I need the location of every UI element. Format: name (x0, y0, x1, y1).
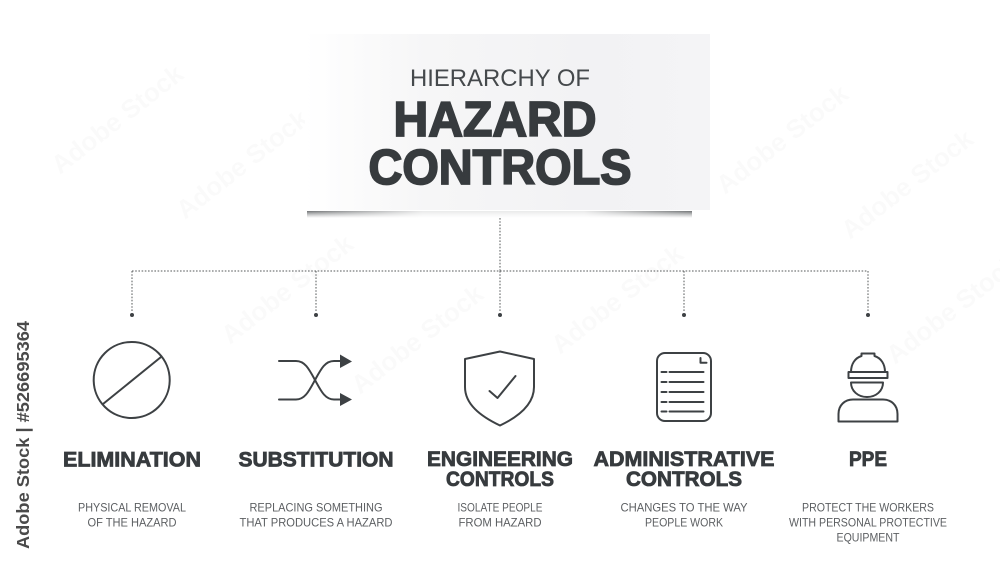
description: administrative controls: PEOPLE WORK (645, 516, 724, 530)
column: substitution (238, 354, 394, 530)
icon: shuffle arrows (279, 354, 352, 406)
description: substitution: REPLACING SOMETHING (250, 500, 382, 514)
description: ppe: WITH PERSONAL PROTECTIVE (789, 516, 947, 530)
icon: document (657, 353, 711, 421)
connector tree (132, 218, 868, 312)
icon: worker with hard hat (838, 354, 898, 422)
icon: prohibition circle (94, 342, 170, 418)
heading: substitution: SUBSTITUTION (238, 448, 394, 472)
description: engineering controls: ISOLATE PEOPLE (458, 500, 542, 514)
column: administrative controls (594, 353, 774, 530)
column: engineering controls (427, 352, 573, 530)
title text: CONTROLS (368, 141, 632, 195)
description: elimination: OF THE HAZARD (88, 516, 177, 530)
description: elimination: PHYSICAL REMOVAL (78, 500, 186, 514)
description: substitution: THAT PRODUCES A HAZARD (240, 516, 393, 530)
connector end dots (130, 313, 870, 317)
heading: ppe: PPE (849, 448, 887, 471)
heading: engineering controls: ENGINEERING (427, 448, 573, 471)
description: elimination (78, 500, 186, 530)
heading: administrative controls: CONTROLS (626, 468, 742, 491)
description: substitution (240, 500, 393, 530)
icon: shield with check (465, 352, 534, 426)
description: administrative controls: CHANGES TO THE WAY (620, 500, 748, 514)
column: ppe (789, 354, 947, 544)
title text: HAZARD (394, 93, 596, 147)
card panel (305, 34, 710, 210)
stock id side label: Adobe Stock | #526695364 (13, 321, 33, 549)
description: ppe: PROTECT THE WORKERS (802, 500, 934, 514)
description: ppe: EQUIPMENT (836, 530, 900, 544)
title text (368, 65, 632, 195)
heading: administrative controls (594, 448, 774, 491)
description: engineering controls (458, 500, 542, 530)
description: administrative controls (620, 500, 748, 530)
heading: administrative controls: ADMINISTRATIVE (594, 448, 774, 471)
heading: engineering controls (427, 448, 573, 491)
watermark pattern (45, 58, 1000, 400)
heading: elimination: ELIMINATION (63, 448, 201, 472)
description: ppe (789, 500, 947, 544)
card shadow (307, 211, 692, 218)
title card (305, 34, 710, 218)
title text: HIERARCHY OF (410, 65, 590, 92)
description: engineering controls: FROM HAZARD (458, 516, 542, 530)
column: elimination (63, 342, 201, 530)
heading: engineering controls: CONTROLS (446, 468, 554, 491)
